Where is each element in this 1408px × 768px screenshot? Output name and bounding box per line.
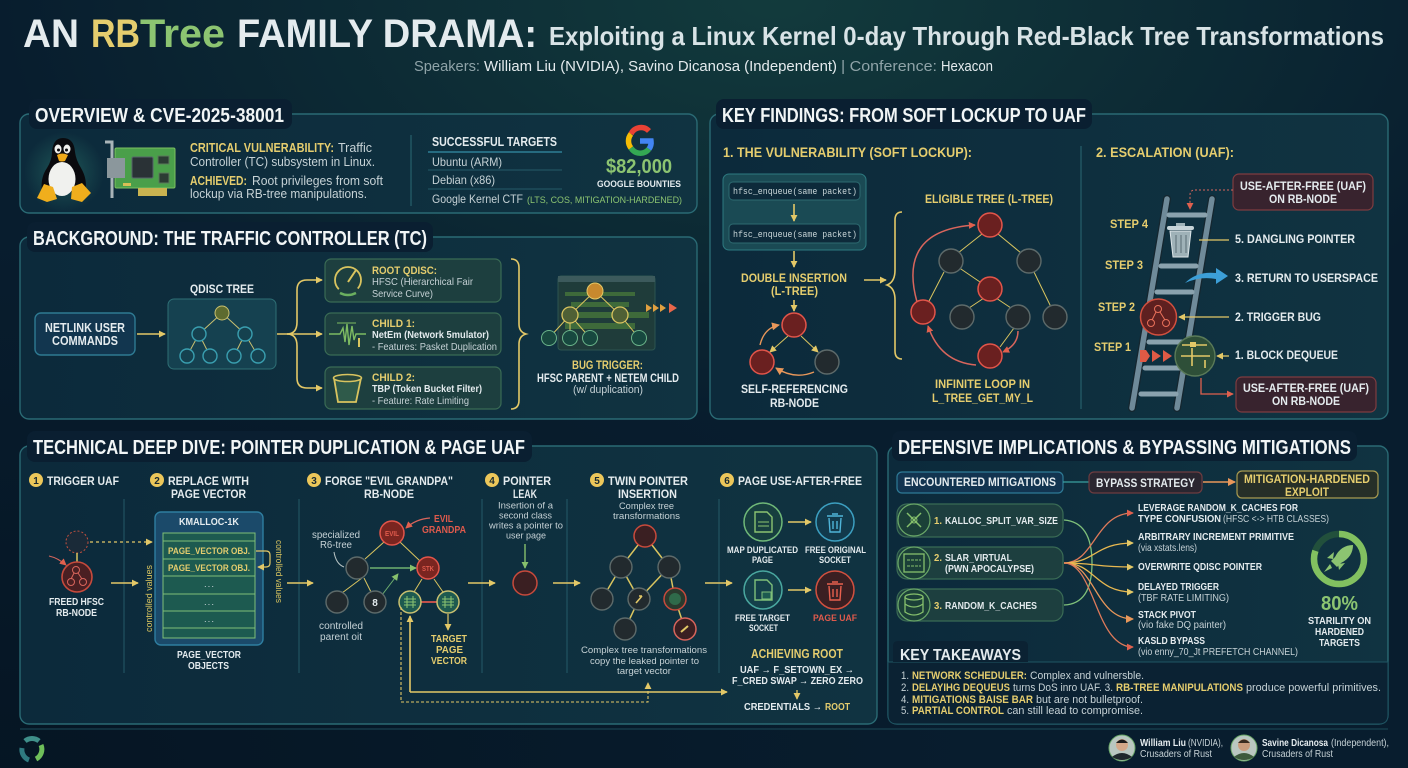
list: successful targets: Google Kernel CTF [432,192,523,206]
text block: achieving root [732,647,863,713]
title: RB [91,12,140,56]
step 2: page vector: ... [204,579,214,590]
step 1: trigger uaf: TRIGGER UAF [47,474,119,488]
stat: bounties [597,156,681,190]
text block: achieving root: F_CRED SWAP → ZERO ZERO [732,675,863,687]
list: successful targets: Debian (x86) [432,173,495,187]
step labels: STEP 1 [1094,342,1132,354]
step 5: twin pointer insertion: Complex tree transformations [581,645,707,656]
panel: key takeaways: RB-TREE MANIPULATIONS [1116,682,1243,694]
flow: mitigations header: EXPLOIT [1285,487,1329,499]
bypass strategy list: OVERWRITE QDISC POINTER [1138,561,1262,573]
mitigation: kalloc: 1. [934,515,942,527]
panel: technical deep dive [20,431,877,724]
step 4: pointer leak: LEAK [513,487,537,501]
text block: critical vulnerability: Traffic [338,140,372,155]
callout: uaf bottom [1201,377,1376,412]
box: child 2 tbf [325,367,501,409]
panel: key takeaways: 4. [901,694,909,706]
step 2: page vector: REPLACE WITH [168,474,249,488]
step 3: evil grandpa: PAGE [436,644,463,656]
stat: bounties: GOOGLE BOUNTIES [597,179,681,190]
step 6: page use-after-free: PAGE UAF [813,613,857,624]
heading: overview [29,99,292,129]
step 3: evil grandpa: EVIL [385,531,400,538]
step 6: page use-after-free: SOCKET [819,555,851,566]
diagram: bug trigger tree [542,276,677,350]
step 2: page vector: ... [204,597,214,608]
step 3: evil grandpa: GRANDPA [422,524,466,536]
panel: key takeaways: turns DoS inro UAF. 3. [1013,682,1113,694]
code box: double enqueue: hfsc_enqueue(same packet) [733,230,857,240]
step 2: page vector: PAGE_VECTOR OBJ. [168,563,250,574]
step 4: pointer leak [485,473,580,595]
step 3: evil grandpa: 8 [372,598,378,609]
panel: key takeaways: PARTIAL CONTROL [912,705,1004,717]
list: successful targets: SUCCESSFUL TARGETS [432,135,557,149]
connector curves [1064,513,1133,647]
step 6: page use-after-free: SOCKET [749,623,778,634]
icon: block dequeue [1140,336,1215,376]
icon: linux penguin [24,132,104,212]
panel: key takeaways: Complex and vulnersble. [1030,670,1144,682]
text block: critical vulnerability: CRITICAL VULNERABILITY: [190,140,334,155]
step 1: trigger uaf: RB-NODE [56,608,97,619]
chart: 80 percent stability donut: HARDENED [1315,626,1364,638]
subheading: vulnerability: 1. THE VULNERABILITY (SOFT LOCKUP): [723,145,972,160]
code box: double enqueue [723,174,866,250]
diagram: eligible tree [911,192,1067,405]
mitigation: slab virtual: 2. [934,552,942,564]
footer: speaker william liu: (NVIDIA), [1188,738,1223,749]
text block: achieving root: CREDENTIALS → [744,701,822,713]
bypass strategy list: DELAYED TRIGGER [1138,581,1219,593]
label: double insertion [741,271,847,298]
step 3: evil grandpa: RB-NODE [364,487,414,501]
text block: achieving root: UAF → F_SETOWN_EX → [740,664,854,676]
arrow: netlink to tree [137,333,165,335]
callout: uaf top: ON RB-NODE [1269,192,1337,206]
icon: network card [105,142,175,198]
arrow and bracket to eligible tree [864,212,902,359]
bracket [511,259,526,409]
panel: key takeaways: can still lead to compromise. [1007,705,1143,717]
step 5: twin pointer insertion: TWIN POINTER [608,474,688,488]
step 4: pointer leak: second class [499,510,552,522]
step 5: twin pointer insertion: target vector [617,666,671,677]
mitigation: slab virtual: SLAR_VIRTUAL [945,552,1012,564]
panel: key takeaways: DELAYIHG DEQUEUS [912,682,1010,694]
footer: speaker william liu: Crusaders of Rust [1140,749,1212,760]
step 3: evil grandpa: specialized [312,530,360,541]
step 4: pointer leak: 4 [489,476,495,487]
step 6: page use-after-free: FREE TARGET [735,613,790,624]
box: child 2 tbf: TBP (Token Bucket Filter) [372,383,482,395]
label: double insertion: DOUBLE INSERTION [741,271,847,285]
heading: technical deep dive [27,431,532,462]
box: netlink commands: COMMANDS [52,334,118,348]
chart: 80 percent stability donut: STARILITY ON [1308,615,1371,627]
step 3: evil grandpa [307,473,727,702]
box: root qdisc: ROOT QDISC: [372,265,437,277]
panel: key takeaways: KEY TAKEAWAYS [900,647,1021,664]
diagram: self-referencing node: SELF-REFERENCING [741,382,848,396]
caption: bug trigger: HFSC PARENT + NETEM CHILD [537,373,679,385]
footer: speaker savino dicanosa: (Independent), [1331,738,1389,749]
step 1: trigger uaf: FREED HFSC [49,597,104,608]
box: child 2 tbf: CHILD 2: [372,372,415,384]
text block: critical vulnerability: Root privileges from soft [252,173,383,188]
caption: bug trigger: (w/ duplication) [573,384,643,396]
title: AN [23,12,79,56]
step 6: page use-after-free: PAGE [752,555,773,566]
flow: mitigations header: ENCOUNTERED MITIGATIONS [904,477,1056,489]
step labels [1094,219,1149,354]
step 3: evil grandpa: TARGET [431,633,467,645]
flow: mitigations header: MITIGATION-HARDENED [1244,474,1370,486]
mitigation: random caches: RANDOM_K_CACHES [945,600,1037,612]
mitigation: kalloc [897,504,1063,537]
icon: trash [1167,223,1194,257]
bypass strategy list: (via xstats.lens) [1138,542,1197,554]
step 2: page vector: KMALLOC-1K [179,516,239,528]
text block: achieving root: ROOT [825,701,850,713]
footer: speaker william liu [1109,735,1223,761]
panel: overview [20,99,697,213]
caption: bug trigger: BUG TRIGGER: [572,360,643,372]
arrows: tree to qdisc boxes [277,280,322,388]
mitigation: kalloc: KALLOC_SPLIT_VAR_SIZE [945,515,1058,527]
step 3: evil grandpa: controlled [319,621,363,632]
bypass strategy list: (TBF RATE LIMITING) [1138,592,1229,604]
step 5: twin pointer insertion: 5 [594,476,600,487]
box: netlink commands: NETLINK USER [45,321,125,335]
speakers line: William Liu (NVIDIA), Savino Dicanosa (Independent) [484,58,837,75]
box: netlink commands [35,313,135,355]
step 2: page vector: 2 [154,476,160,487]
speakers line: Hexacon [941,58,993,75]
mitigation: slab virtual [897,547,1063,579]
label: block dequeue: 1. BLOCK DEQUEUE [1235,348,1338,362]
callout: uaf top: USE-AFTER-FREE (UAF) [1240,179,1366,193]
box: child 1 netem [325,313,501,355]
bypass strategy list: (vio enny_70_Jt PREFETCH CHANNEL) [1138,646,1298,658]
footer: speaker savino dicanosa: Savine Dicanosa [1262,738,1328,749]
heading: key findings: KEY FINDINGS: FROM SOFT LOCKUP TO UAF [722,105,1086,127]
caption: bug trigger [537,360,679,396]
box: root qdisc: HFSC (Hierarchical Fair [372,276,473,288]
step 3: evil grandpa: VECTOR [431,655,467,667]
chart: 80 percent stability donut: TARGETS [1319,637,1360,649]
diagram: qdisc tree: QDISC TREE [190,282,254,296]
panel: key takeaways: MITIGATIONS BAISE BAR [912,694,1033,706]
flow: mitigations header [897,471,1378,499]
step 2: page vector: PAGE VECTOR [171,487,246,501]
bypass strategy list: (vio fake DQ painter) [1138,619,1226,631]
step 2: page vector: controlled values [273,540,284,603]
panel: key takeaways: produce powerful primitives. [1246,682,1381,694]
mitigation: random caches: 3. [934,600,942,612]
diagram: self-referencing node: RB-NODE [770,396,819,410]
bypass strategy list: TYPE CONFUSION [1138,513,1221,525]
step 3: evil grandpa: 3 [311,476,317,487]
callout: uaf bottom: ON RB-NODE [1272,394,1340,408]
heading: technical deep dive: TECHNICAL DEEP DIVE: POINTER DUPLICATION & PAGE UAF [33,437,525,459]
diagram: eligible tree: INFINITE LOOP IN [935,377,1030,391]
bypass strategy list: ARBITRARY INCREMENT PRIMITIVE [1138,531,1294,543]
speakers line: Speakers: [414,58,480,75]
heading: background [27,222,433,252]
text block: critical vulnerability: lockup via RB-tree manipulations. [190,186,367,201]
diagram: qdisc tree [168,282,276,369]
arrow: to double insertion [793,251,795,267]
bypass strategy list [1138,502,1329,658]
mitigation: slab virtual: (PWN APOCALYPSE) [945,563,1034,575]
panel: key takeaways: 5. [901,705,909,717]
subheading: escalation: 2. ESCALATION (UAF): [1096,145,1234,160]
list: successful targets: Ubuntu (ARM) [432,155,502,169]
footer: speaker savino dicanosa: Crusaders of Rust [1262,749,1333,760]
step 2: page vector: PAGE_VECTOR [177,649,241,661]
panel: key takeaways: but are not bulletproof. [1036,694,1143,706]
title: Tree [140,12,225,56]
label: trigger bug: 2. TRIGGER BUG [1235,310,1321,324]
step 5: twin pointer insertion [581,473,732,677]
text block: achieving root: ACHIEVING ROOT [751,647,843,661]
step 5: twin pointer insertion: INSERTION [618,487,677,501]
callout: uaf bottom: USE-AFTER-FREE (UAF) [1243,381,1369,395]
step labels: STEP 4 [1110,219,1149,231]
title: FAMILY DRAMA: [237,12,537,56]
bypass strategy list: KASLD BYPASS [1138,635,1205,647]
step 6: page use-after-free: PAGE USE-AFTER-FREE [738,474,862,488]
text block: critical vulnerability: Controller (TC) subsystem in Linux. [190,154,375,169]
box: child 1 netem: NetEm (Network 5mulator) [372,329,489,341]
box: root qdisc: Service Curve) [372,288,433,300]
diagram: escalation ladder [1094,199,1215,408]
panel: key takeaways: NETWORK SCHEDULER: [912,670,1027,682]
title [23,12,1384,56]
step 6: page use-after-free: 6 [724,476,730,487]
panel: key findings [710,99,1388,419]
step 3: evil grandpa: FORGE "EVIL GRANDPA" [325,474,453,488]
step 4: pointer leak: POINTER [503,474,551,488]
step 6: page use-after-free [720,473,866,634]
panel: defensive implications [888,431,1388,724]
footer: speaker william liu: William Liu [1140,738,1186,749]
heading: background: BACKGROUND: THE TRAFFIC CONTROLLER (TC) [33,228,427,250]
diagram: eligible tree: L_TREE_GET_MY_L [932,391,1033,405]
step 6: page use-after-free: MAP DUPLICATED [727,545,798,556]
box: root qdisc [325,259,501,302]
heading: overview: OVERVIEW & CVE-2025-38001 [35,105,284,127]
step 2: page vector [144,473,313,672]
step 4: pointer leak: writes a pointer to [488,520,563,532]
box: child 2 tbf: - Feature: Rate Limiting [372,395,469,407]
step 5: twin pointer insertion: Complex tree [619,501,674,512]
list: successful targets [428,135,682,206]
step 4: pointer leak: user page [506,530,546,542]
step 5: twin pointer insertion: copy the leaked pointer to [590,656,699,667]
step 4: pointer leak: Insertion of a [498,500,554,512]
step 3: evil grandpa: R6-tree [320,540,352,551]
icon: trigger bug node [1140,299,1176,335]
step 1: trigger uaf [29,473,152,619]
step 2: page vector: controlled values [144,565,155,632]
speakers line [414,58,993,75]
text block: critical vulnerability: ACHIEVED: [190,173,247,188]
chart: 80 percent stability donut [1308,534,1371,649]
label: dangling pointer: 5. DANGLING POINTER [1235,232,1355,246]
list: successful targets: (LTS, COS, MITIGATION-HARDENED) [527,195,682,206]
label: return to userspace: 3. RETURN TO USERSPACE [1235,271,1378,285]
bypass strategy list: LEVERAGE RANDOM_K_CACHES FOR [1138,502,1298,514]
step 2: page vector: ... [204,614,214,625]
chart: 80 percent stability donut: 80% [1321,593,1358,615]
bypass strategy list: STACK PIVOT [1138,609,1196,621]
step 3: evil grandpa: STK [422,566,434,573]
step 1: trigger uaf: 1 [33,476,39,487]
box: child 1 netem: - Features: Pasket Duplication [372,341,497,353]
code box: double enqueue: hfsc_enqueue(same packet) [733,187,857,197]
panel: key takeaways: 1. [901,670,909,682]
step labels: STEP 2 [1098,302,1135,314]
flow: mitigations header: BYPASS STRATEGY [1096,478,1195,490]
label: return to userspace [1185,268,1378,285]
speakers line: | Conference: [841,58,937,75]
step 2: page vector: OBJECTS [188,660,229,672]
panel: key takeaways [888,641,1388,724]
panel: background [20,222,697,419]
footer logo [22,738,42,760]
heading: defensive implications [892,431,1357,461]
step 3: evil grandpa: EVIL [434,513,453,525]
heading: key findings [716,99,1092,129]
mitigation: random caches [897,589,1063,621]
step 3: evil grandpa: parent oit [320,632,362,643]
step 5: twin pointer insertion: transformations [613,511,680,522]
step labels: STEP 3 [1105,260,1143,272]
stat: bounties: $82,000 [606,156,672,178]
text block: critical vulnerability [190,140,383,201]
callout: uaf top [1190,174,1373,210]
label: double insertion: (L-TREE) [771,284,818,298]
diagram: eligible tree: ELIGIBLE TREE (L-TREE) [925,192,1053,206]
step 2: page vector: PAGE_VECTOR OBJ. [168,546,250,557]
bypass strategy list: (HFSC <-> HTB CLASSES) [1223,513,1329,525]
panel: key takeaways: 2. [901,682,909,694]
diagram: self-referencing node [741,300,848,410]
footer: speaker savino dicanosa [1231,735,1389,761]
step 6: page use-after-free: FREE ORIGINAL [805,545,866,556]
box: child 1 netem: CHILD 1: [372,318,415,330]
icon: google G [628,128,651,153]
